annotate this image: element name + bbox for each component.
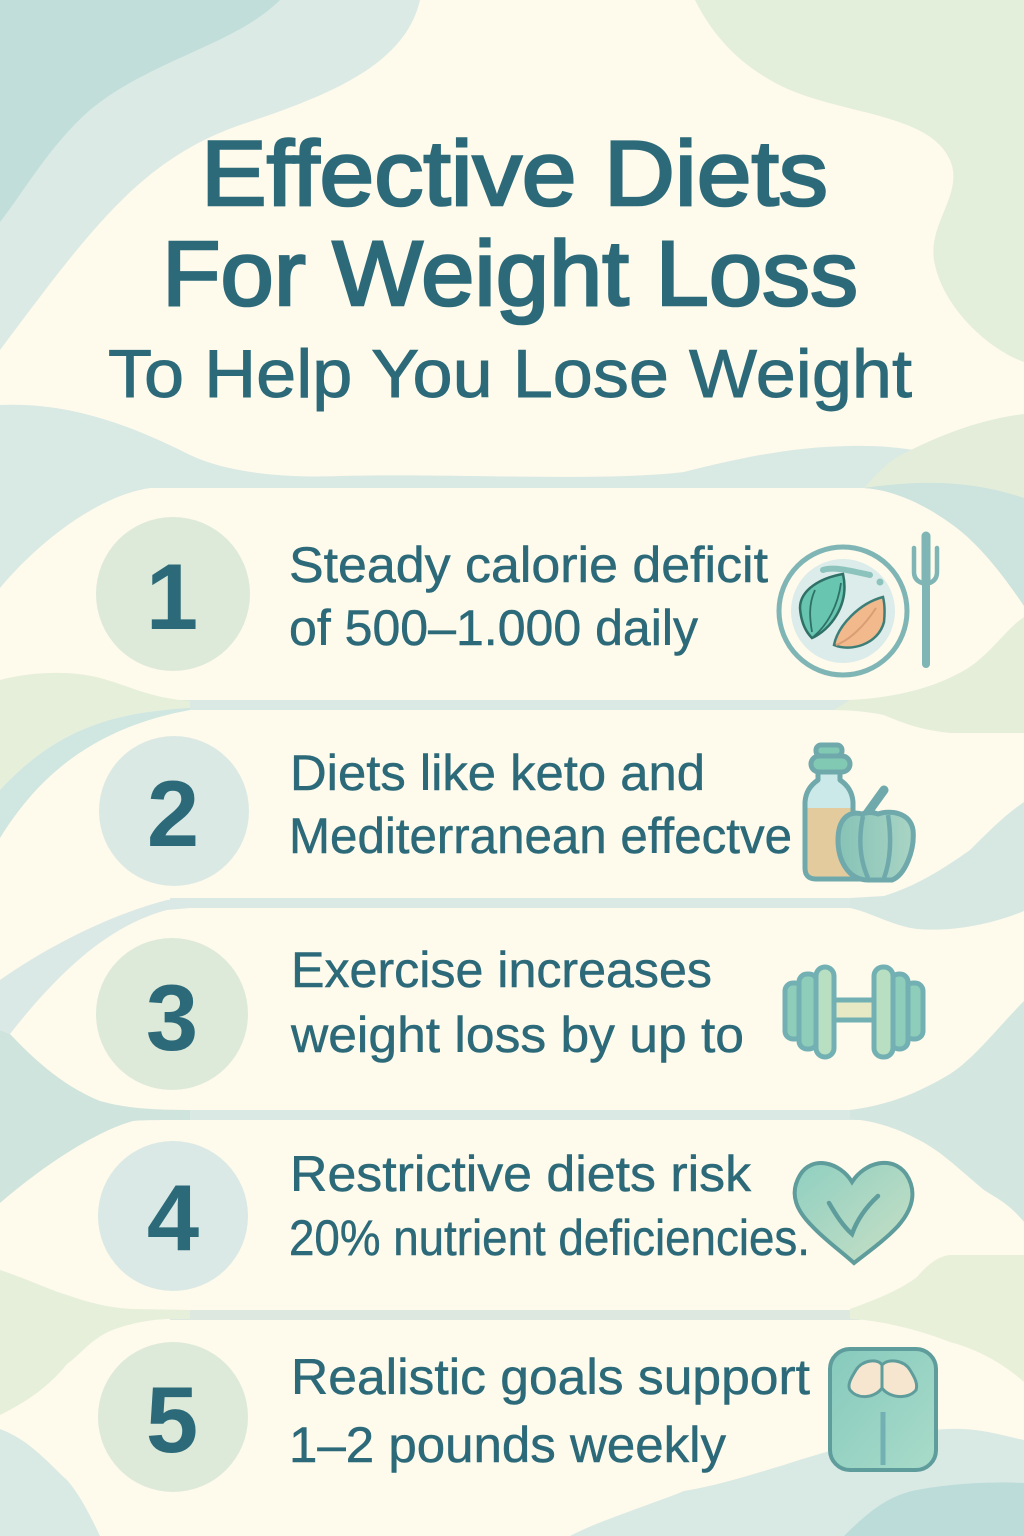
number badge 5: 5 — [146, 1367, 198, 1472]
text 1: Steady calorie deficit — [289, 537, 768, 593]
text 2 — [289, 745, 792, 864]
number badge 1: 1 — [146, 544, 198, 649]
subtitle: To Help You Lose Weight — [108, 336, 912, 412]
number badge 5 — [98, 1342, 248, 1492]
title — [162, 123, 858, 325]
icon: bathroom scale — [830, 1349, 936, 1470]
icon: dumbbell — [785, 967, 923, 1057]
icon: heart with check — [795, 1163, 912, 1263]
icon: plate with leaves and fork — [779, 536, 937, 675]
item 2 — [99, 736, 913, 886]
number badge 3: 3 — [146, 965, 198, 1070]
text 2: Mediterranean effectve — [289, 808, 792, 864]
icon: bottle and pepper — [805, 745, 913, 880]
text 2: Diets like keto and — [290, 745, 705, 801]
number badge 2: 2 — [147, 761, 199, 866]
number badge 2 — [99, 736, 249, 886]
text 1: of 500–1.000 daily — [289, 600, 698, 656]
fork — [914, 536, 937, 664]
number badge 3 — [96, 938, 248, 1090]
number badge 4: 4 — [147, 1165, 199, 1270]
title: Effective Diets — [201, 123, 828, 225]
text 1 — [289, 537, 768, 656]
text 4: 20% nutrient deficiencies. — [289, 1210, 810, 1266]
text 5: Realistic goals support — [291, 1349, 810, 1405]
text 3 — [290, 942, 744, 1063]
number badge 1 — [96, 517, 250, 671]
text 5 — [289, 1349, 810, 1473]
item 1 — [96, 517, 937, 675]
item 3 — [96, 938, 923, 1090]
text 4: Restrictive diets risk — [290, 1146, 752, 1202]
item 5 — [98, 1342, 936, 1492]
text 4 — [289, 1146, 810, 1266]
item 4 — [98, 1141, 912, 1291]
text 3: weight loss by up to — [290, 1007, 744, 1063]
number badge 4 — [98, 1141, 248, 1291]
title: For Weight Loss — [162, 223, 858, 325]
text 5: 1–2 pounds weekly — [289, 1417, 726, 1473]
text 3: Exercise increases — [291, 942, 712, 998]
